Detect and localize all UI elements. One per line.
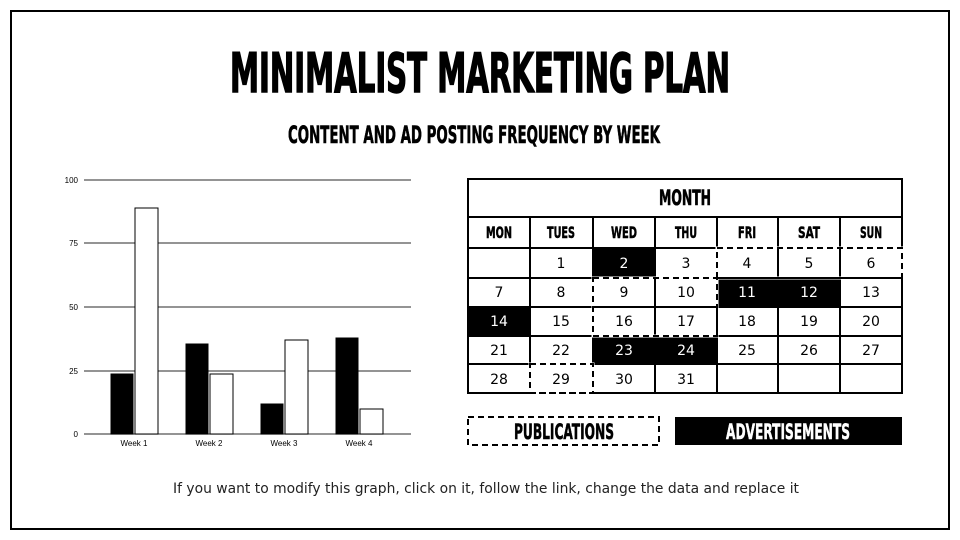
calendar: 30 [615,372,633,388]
calendar: 16 [615,314,633,330]
calendar: 15 [552,314,570,330]
calendar: 31 [677,372,695,388]
calendar: 11 [738,285,756,301]
calendar: 26 [800,343,818,359]
bar chart: Week 3 [271,439,298,448]
calendar: 13 [862,285,880,301]
calendar: 22 [552,343,570,359]
calendar: MON [486,223,512,242]
bar chart: 25 [69,367,79,376]
bar chart: 0 [74,430,79,439]
legend: advertisements: ADVERTISEMENTS [726,420,850,444]
calendar: 12 [800,285,818,301]
calendar: 7 [495,285,503,301]
calendar: 18 [738,314,756,330]
calendar: 29 [552,372,570,388]
bar chart [65,176,411,448]
calendar: 1 [557,256,565,272]
calendar: MONTH [659,186,711,210]
subtitle: CONTENT AND AD POSTING FREQUENCY BY WEEK [288,121,661,149]
bar chart: 50 [69,303,79,312]
calendar: SUN [860,223,882,242]
calendar: 3 [682,256,690,272]
calendar [468,179,902,393]
bar chart: Week 2 [196,439,223,448]
calendar: 17 [677,314,695,330]
calendar: SAT [798,223,820,242]
calendar: THU [675,223,697,242]
calendar: 5 [805,256,813,272]
calendar: 25 [738,343,756,359]
calendar: 27 [862,343,880,359]
calendar: 4 [743,256,752,272]
bar chart: Week 1 [121,439,148,448]
calendar: 28 [490,372,508,388]
calendar: TUES [547,223,575,242]
calendar: 8 [557,285,565,301]
calendar: FRI [738,223,756,242]
bar chart: 75 [69,239,79,248]
calendar: 14 [490,314,508,330]
calendar: 19 [800,314,818,330]
calendar: 10 [677,285,695,301]
calendar: 24 [677,343,695,359]
calendar: 23 [615,343,633,359]
footer note: If you want to modify this graph, click on it, follow the link, change the data and replace it [173,481,799,497]
legend: publications [468,417,659,445]
legend: publications: PUBLICATIONS [514,420,614,444]
calendar: WED [611,223,637,242]
bar chart: Week 4 [346,439,373,448]
calendar: 21 [490,343,508,359]
calendar: 6 [867,256,876,272]
bar chart: 100 [65,176,79,185]
calendar: 9 [620,285,628,301]
legend: advertisements [675,417,902,445]
calendar: 20 [862,314,880,330]
calendar: 2 [620,256,628,272]
